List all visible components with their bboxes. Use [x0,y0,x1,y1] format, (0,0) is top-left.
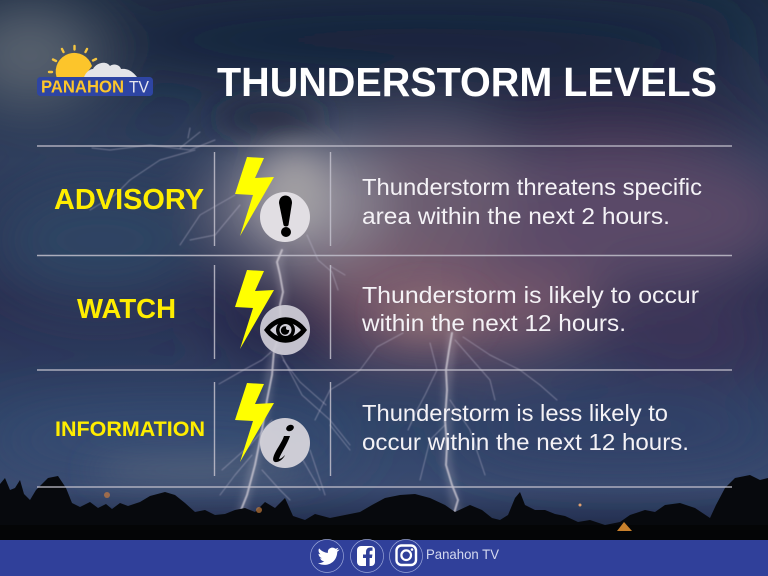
lightning strikes in the background [90,128,557,520]
icon: lightning bolt [235,157,274,236]
level label: advisory: ADVISORY [54,184,204,216]
logo banner [37,77,153,96]
icon: lightning bolt [235,270,274,349]
icon: information badge [260,418,310,468]
description: watch: within the next 12 hours. [361,310,626,336]
icon: facebook [350,540,384,572]
logo: Panahon TV: TV [129,78,149,96]
row: information [55,383,689,468]
icon: exclamation badge [260,192,310,242]
logo wordmark: PANAHON [41,76,124,96]
lights on the horizon [104,492,632,531]
logo: Panahon TV [37,46,153,96]
icon: cloud [84,63,137,77]
description: watch: Thunderstorm is likely to occur [362,282,699,308]
footer bar [0,540,768,576]
icon: twitter [310,540,344,572]
description: advisory: Thunderstorm threatens specific [362,174,702,200]
footer label: Panahon TV [426,546,500,562]
icon: instagram [390,540,422,572]
row: watch [77,270,699,355]
level label: watch: WATCH [77,293,176,324]
treeline silhouette [0,475,768,540]
description: information: Thunderstorm is less likely to [362,400,668,426]
description: advisory: area within the next 2 hours. [362,203,670,229]
level label: information: INFORMATION [55,418,205,441]
description: information: occur within the next 12 hours. [362,429,689,455]
icon: lightning bolt [235,383,274,462]
icon: sun with rays [49,46,96,77]
icon: eye badge [260,305,310,355]
row: advisory [54,157,702,242]
title: THUNDERSTORM LEVELS [217,59,717,105]
